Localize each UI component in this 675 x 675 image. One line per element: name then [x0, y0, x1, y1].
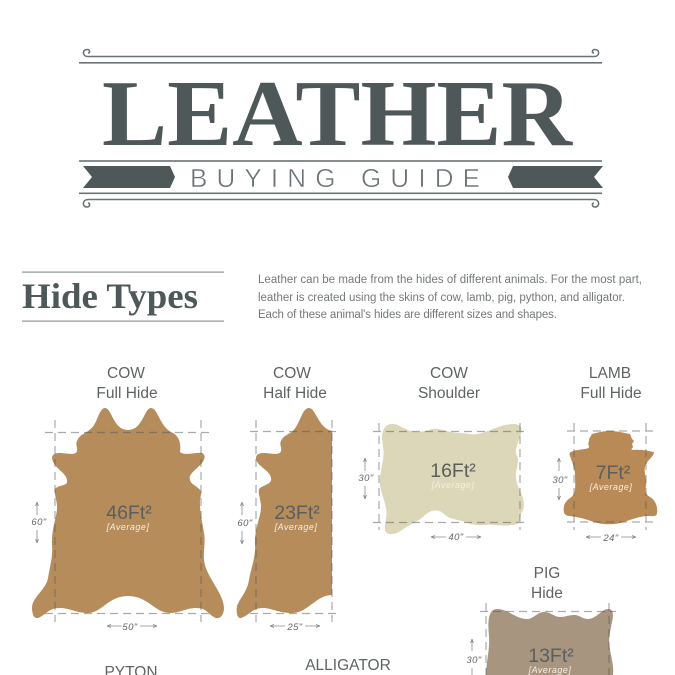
hide shape — [237, 408, 332, 618]
panel: cow full hide — [31, 365, 224, 633]
width dimension: 25" — [286, 622, 303, 633]
width dimension — [270, 622, 320, 633]
measurement guides — [567, 423, 654, 530]
size: 13Ft² — [528, 645, 574, 667]
intro text: Leather can be made from the hides of different animals. For the most part, — [258, 274, 642, 286]
label: LAMB — [589, 365, 631, 382]
height dimension: 30" — [466, 655, 482, 666]
subtitle: BUYING GUIDE: BUYING GUIDE — [190, 163, 480, 193]
left ribbon — [83, 166, 175, 188]
panel: cow half hide — [237, 365, 336, 633]
bottom scroll rule — [83, 200, 599, 207]
lower rule — [79, 192, 602, 194]
heading: Hide Types: Hide Types — [22, 276, 198, 316]
label: PIG — [534, 565, 560, 582]
label: Hide — [531, 585, 563, 602]
height dimension: 30" — [358, 473, 374, 484]
label: alligator: ALLIGATOR — [305, 657, 391, 674]
width dimension: 50" — [122, 622, 138, 633]
top scroll rule — [83, 50, 599, 56]
measurement guides — [480, 603, 616, 675]
label: COW — [430, 365, 468, 382]
label: COW — [107, 365, 145, 382]
width dimension: 24" — [602, 533, 619, 544]
height dimension — [237, 502, 253, 544]
height dimension: 30" — [552, 475, 568, 486]
panel: cow shoulder — [358, 365, 527, 543]
panel: lamb full hide — [552, 365, 657, 544]
width dimension — [586, 533, 636, 544]
size: 23Ft² — [274, 502, 320, 524]
panel: pig hide — [466, 565, 616, 675]
hide shape — [380, 424, 524, 534]
header: title block — [79, 50, 603, 207]
width dimension — [431, 532, 481, 543]
measurement guides — [45, 420, 213, 622]
label: COW — [273, 365, 311, 382]
label: Shoulder — [418, 385, 480, 402]
middle rule — [79, 160, 602, 162]
hide shape — [486, 609, 613, 675]
note: [Average] — [431, 480, 474, 490]
note: [Average] — [528, 665, 571, 675]
intro text — [258, 274, 642, 321]
note: [Average] — [589, 482, 632, 492]
size: 46Ft² — [106, 502, 152, 524]
intro text: leather is created using the skins of cow, lamb, pig, python, and alligator. — [258, 292, 625, 304]
note: [Average] — [106, 522, 149, 532]
height dimension — [466, 639, 482, 675]
size: 16Ft² — [430, 460, 476, 482]
width dimension — [107, 622, 157, 633]
height dimension: 60" — [237, 518, 253, 529]
label: Full Hide — [96, 385, 158, 402]
hide shape — [564, 431, 657, 524]
measurement guides — [250, 420, 336, 622]
label: Half Hide — [263, 385, 327, 402]
top rule — [79, 62, 602, 64]
size: 7Ft² — [596, 462, 631, 484]
hide shape — [32, 408, 224, 618]
height dimension — [552, 458, 568, 500]
label: Full Hide — [580, 385, 642, 402]
measurement guides — [373, 423, 527, 530]
height dimension: 60" — [31, 517, 47, 528]
height dimension — [358, 458, 374, 499]
intro text: Each of these animal's hides are different sizes and shapes. — [258, 309, 557, 321]
width dimension: 40" — [448, 532, 464, 543]
right ribbon — [508, 166, 603, 188]
height dimension — [31, 502, 47, 543]
title: LEATHER: LEATHER — [102, 62, 573, 166]
note: [Average] — [274, 522, 317, 532]
